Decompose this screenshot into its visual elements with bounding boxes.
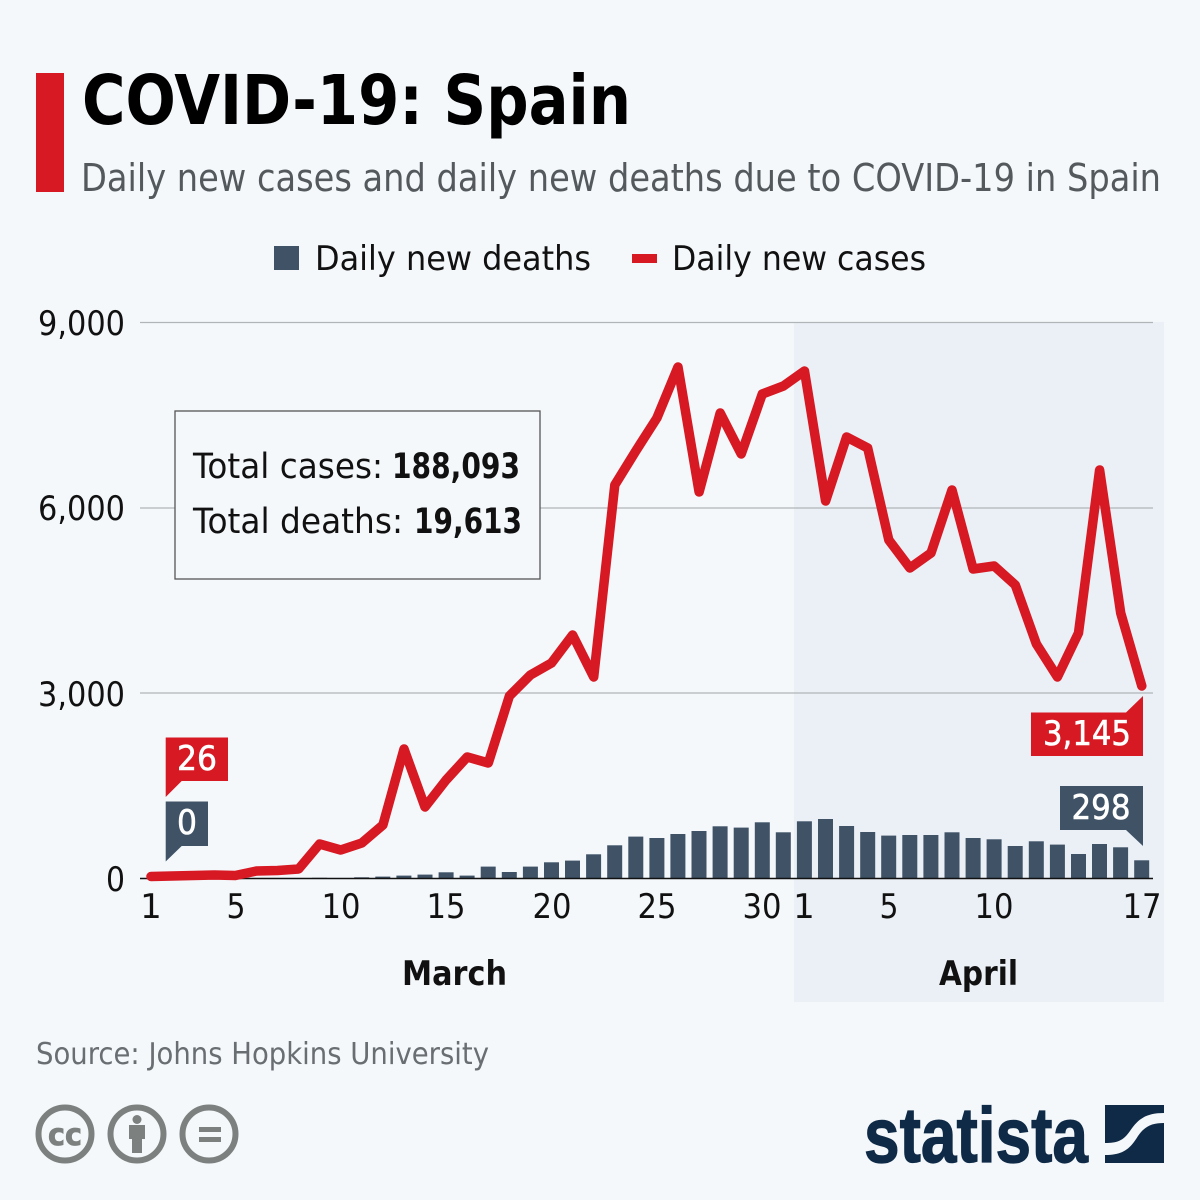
legend label: deaths: Daily new deaths xyxy=(315,239,591,279)
legend xyxy=(274,239,926,279)
legend swatch: cases xyxy=(632,254,657,263)
legend label: cases: Daily new cases xyxy=(672,239,926,279)
y axis labels: 0 xyxy=(106,860,125,900)
y axis labels xyxy=(38,304,125,900)
icon: creative commons: cc xyxy=(48,1118,82,1153)
icon: creative commons xyxy=(38,1108,92,1160)
x axis day labels: 10 xyxy=(322,887,360,927)
callout: last day deaths 298: 298 xyxy=(1072,788,1130,828)
callout: last day cases 3,145 xyxy=(1031,696,1143,756)
bar chart: daily new deaths xyxy=(312,819,1149,878)
total cases xyxy=(192,447,520,487)
title: COVID-19: Spain xyxy=(82,61,631,141)
callout: first day deaths 0 xyxy=(166,802,208,862)
total deaths: Total deaths: xyxy=(192,502,403,542)
source: Source: Johns Hopkins University xyxy=(36,1037,489,1072)
callout: first day cases 26 xyxy=(166,738,228,797)
statista logo xyxy=(864,1091,1164,1179)
totals box xyxy=(175,411,540,579)
month label: March: March xyxy=(402,954,507,994)
April highlight band xyxy=(794,322,1164,1002)
callout: first day deaths 0: 0 xyxy=(177,803,197,843)
callout: last day deaths 298 xyxy=(1060,786,1143,846)
x axis baseline xyxy=(140,878,1153,880)
total cases: Total cases: xyxy=(192,447,383,487)
x axis day labels: 1 xyxy=(793,887,815,927)
x axis day labels: 20 xyxy=(532,887,572,927)
logo wordmark: statista xyxy=(864,1091,1088,1179)
y axis labels: 6,000 xyxy=(38,489,125,529)
total cases: 188,093 xyxy=(392,447,520,487)
x axis day labels: 1 xyxy=(140,887,162,927)
gridlines xyxy=(140,322,1153,693)
line chart: daily new cases xyxy=(151,367,1142,876)
x axis day labels: 5 xyxy=(880,887,898,927)
y axis labels: 9,000 xyxy=(38,304,125,344)
x axis day labels: 5 xyxy=(226,887,246,927)
x axis day labels: 10 xyxy=(974,887,1014,927)
callout: first day cases 26: 26 xyxy=(177,739,217,779)
title accent bar xyxy=(36,73,64,192)
icon: attribution xyxy=(110,1108,164,1160)
total deaths xyxy=(192,502,522,542)
month label: April: April xyxy=(939,954,1018,994)
total deaths: 19,613 xyxy=(414,502,522,542)
icon: no derivatives xyxy=(182,1108,236,1160)
x axis day labels: 17 xyxy=(1122,887,1162,927)
x axis day labels: 15 xyxy=(426,887,466,927)
x axis day labels xyxy=(140,887,1162,927)
legend swatch: deaths xyxy=(274,246,299,270)
x axis day labels: 25 xyxy=(638,887,676,927)
callout: last day cases 3,145: 3,145 xyxy=(1043,714,1131,754)
y axis labels: 3,000 xyxy=(38,675,125,715)
x axis day labels: 30 xyxy=(742,887,782,927)
logo mark xyxy=(1105,1105,1164,1163)
